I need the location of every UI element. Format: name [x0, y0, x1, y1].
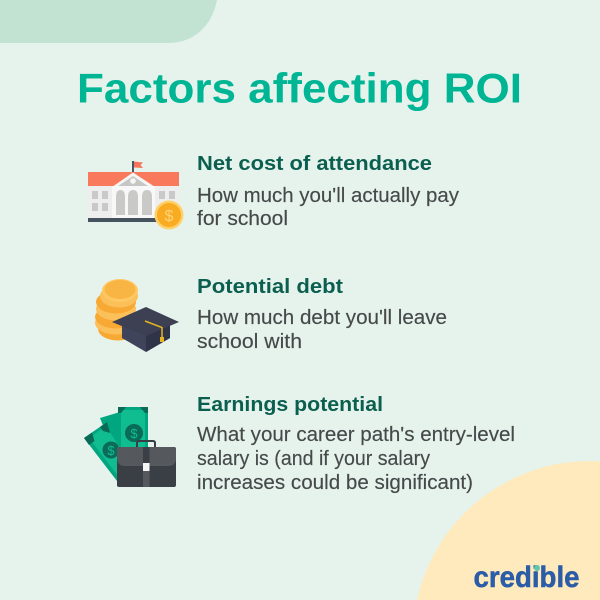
icon: school building with coin — [88, 161, 184, 230]
icon: school building with coin: $ — [165, 208, 174, 225]
heading: Net cost of attendance — [197, 153, 432, 175]
icon: coins and graduation cap — [95, 279, 179, 352]
text block: increases could be significant) — [197, 472, 473, 494]
icon: money and briefcase — [84, 407, 176, 487]
text block: How much you'll actually pay — [197, 185, 459, 207]
heading: Potential debt — [197, 276, 343, 298]
item: earnings potential — [84, 394, 515, 494]
text block: What your career path's entry-level — [197, 424, 515, 446]
text block: salary is (and if your salary — [197, 448, 430, 470]
logo: credible: credible — [474, 561, 580, 594]
text block: for school — [197, 208, 288, 230]
item: potential debt — [95, 276, 447, 353]
icon: money and briefcase: $ — [107, 443, 115, 458]
icon: money and briefcase: $ — [130, 426, 138, 441]
heading: Earnings potential — [197, 394, 383, 416]
corner shape: bottom right cream — [417, 461, 600, 600]
item: net cost of attendance — [88, 153, 459, 230]
text block: school with — [197, 331, 302, 353]
title: Factors affecting ROI — [77, 64, 522, 112]
text block: How much debt you'll leave — [197, 307, 447, 329]
corner shape: top left green — [0, 0, 217, 43]
